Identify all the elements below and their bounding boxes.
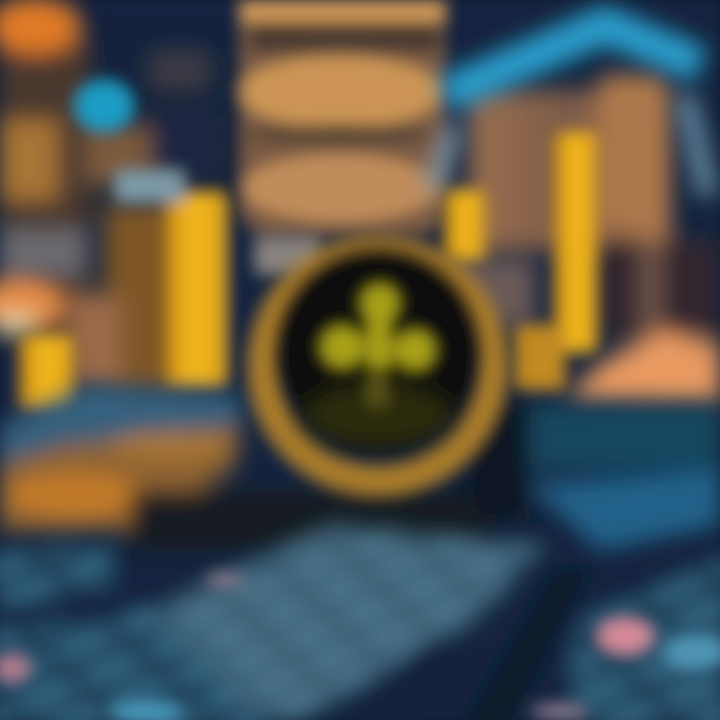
panel: lower left orange ground xyxy=(0,385,490,550)
panel: right building xyxy=(440,75,720,402)
coin outer ring xyxy=(263,251,493,481)
chart: yellow bars xyxy=(20,132,597,410)
coin inner disc xyxy=(278,250,478,450)
panel: top dark sky xyxy=(80,0,240,220)
icon: gold coin xyxy=(263,250,493,481)
coin lower tint xyxy=(303,383,453,447)
icon: blue glow xyxy=(74,80,134,132)
arrow: blue roof line xyxy=(432,25,708,195)
icon: clover emblem xyxy=(319,282,437,407)
panel: bottom keys detail xyxy=(0,570,720,720)
panel: right teal steps xyxy=(470,400,720,550)
panel: bottom keyboard grid xyxy=(0,525,720,720)
panel: central tower xyxy=(238,0,445,274)
panel: left buildings xyxy=(0,0,220,390)
